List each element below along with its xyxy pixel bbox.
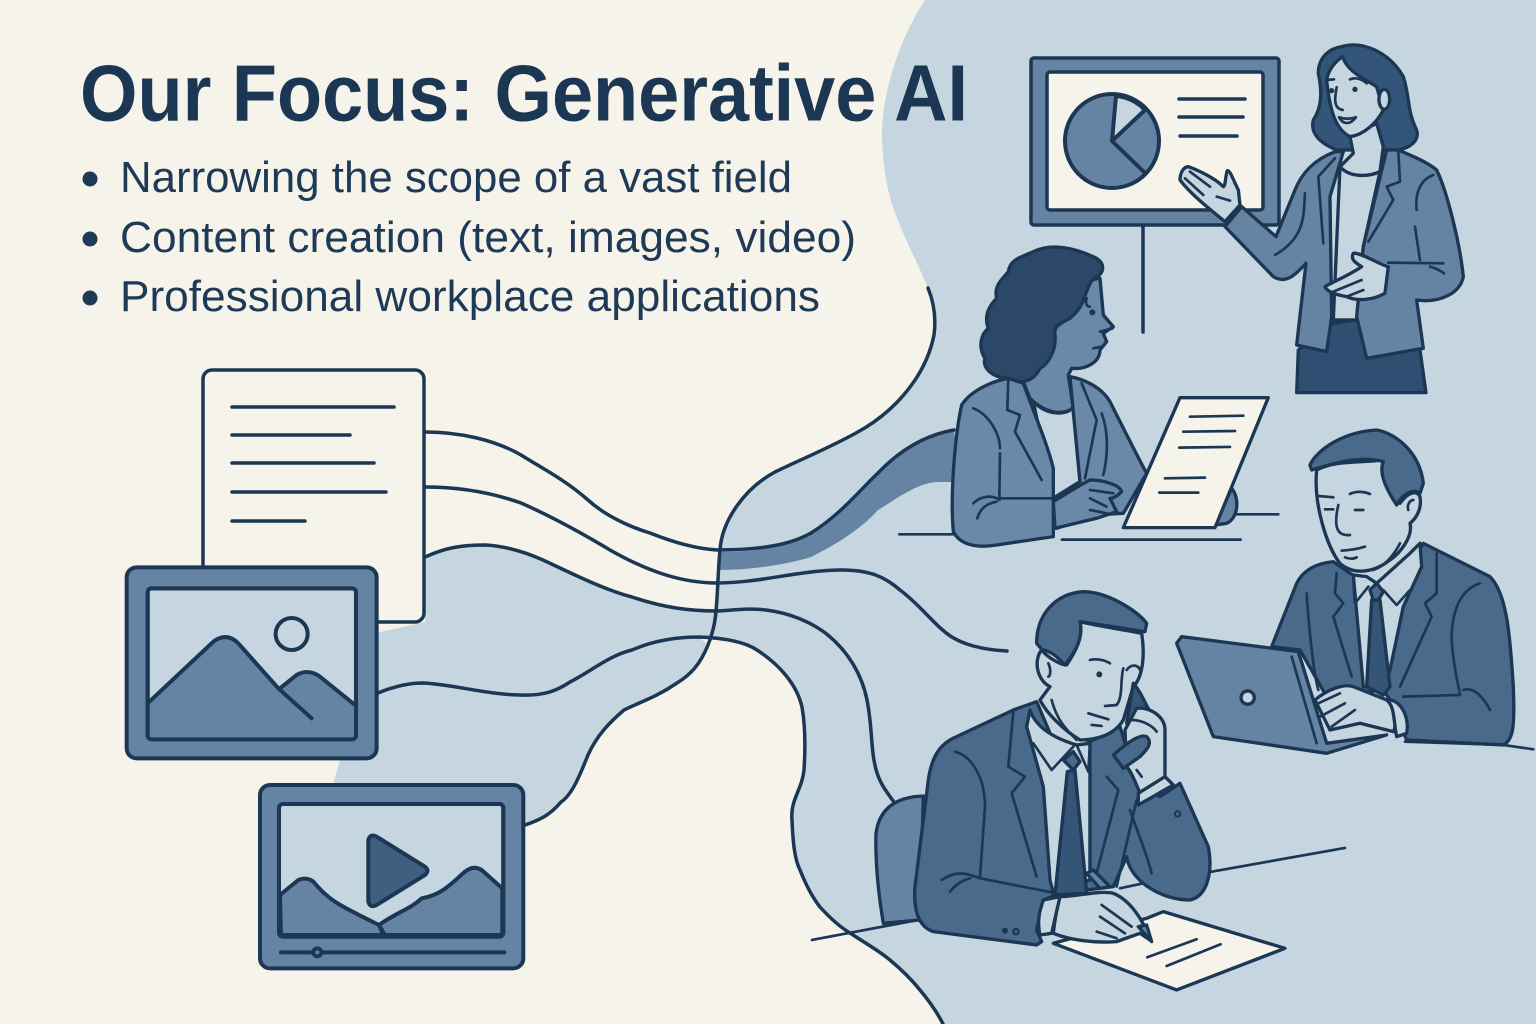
icon: image frame [127, 567, 377, 758]
title: Our Focus: Generative AI [80, 48, 968, 138]
icon: text document [203, 370, 424, 622]
presenter woman [1180, 45, 1463, 393]
bullet list: Professional workplace applications [120, 272, 820, 321]
presentation board [1031, 58, 1279, 332]
man with laptop [1177, 430, 1533, 753]
connecting flow lines [378, 288, 1007, 1024]
man on the phone [812, 592, 1345, 990]
bullet list: Content creation (text, images, video) [120, 213, 856, 262]
bullet list [82, 153, 856, 321]
shaded ribbon [720, 430, 960, 570]
pie chart [1065, 94, 1159, 188]
bullet list: Narrowing the scope of a vast field [120, 153, 792, 202]
icon: video player [260, 785, 523, 968]
seated woman with document [899, 247, 1278, 546]
